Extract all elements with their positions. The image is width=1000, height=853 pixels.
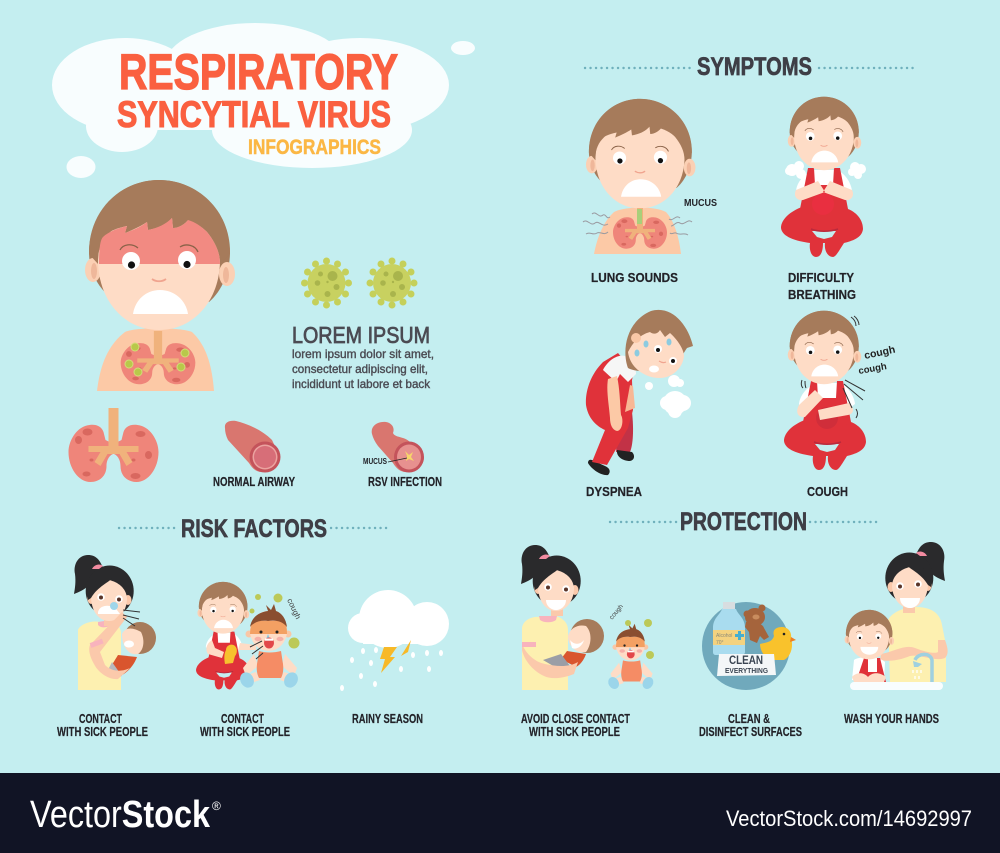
registered mark: ® [212, 799, 221, 813]
icon: viruses [301, 258, 418, 308]
water [913, 670, 921, 679]
arm and hand [607, 376, 622, 431]
symptom: dyspnea [586, 310, 693, 499]
symptom: lung sounds [583, 99, 717, 285]
text block: lorem ipsum: lorem ipsum dolor sit amet, [292, 347, 434, 361]
label: DYSPNEA [586, 485, 642, 499]
head [788, 97, 861, 170]
title line 1: RESPIRATORY [119, 44, 398, 100]
mother body [78, 620, 121, 690]
protection: wash your hands [844, 542, 948, 726]
head [788, 311, 861, 384]
baby [570, 619, 604, 653]
mucus label: MUCUS [363, 456, 387, 466]
text block: lorem ipsum: LOREM IPSUM [292, 322, 430, 348]
arms [795, 181, 853, 200]
heading: risk factors: RISK FACTORS [181, 515, 327, 543]
mother body [888, 607, 946, 682]
body [784, 381, 866, 470]
symptom: difficulty breathing [781, 97, 866, 302]
label: WITH SICK PEOPLE [529, 725, 620, 739]
back leg [616, 412, 633, 452]
label: BREATHING [788, 288, 856, 302]
lightning [380, 640, 411, 673]
teddy bear [744, 604, 769, 643]
sign [717, 654, 776, 676]
protection: clean and disinfect [699, 602, 802, 739]
airway tube [225, 421, 280, 472]
mucus pointer [388, 458, 407, 462]
cough text: cough [285, 597, 303, 621]
mother arm [89, 612, 130, 679]
icon: lungs [68, 408, 158, 482]
virus spots in lungs [125, 343, 189, 376]
label: CONTACT [79, 712, 122, 726]
label: AVOID CLOSE CONTACT [521, 712, 630, 726]
cough text: cough [608, 603, 625, 621]
breath puffs [785, 161, 866, 179]
lungs [121, 331, 195, 384]
logo: VectorStock [30, 794, 211, 836]
overalls [586, 353, 634, 465]
shoes [588, 450, 634, 475]
baby shirt [110, 655, 137, 675]
label [521, 712, 630, 739]
label [57, 712, 148, 739]
risk: rainy season [340, 590, 449, 726]
head [85, 180, 235, 330]
mother head [885, 542, 945, 613]
arm behind [625, 385, 635, 412]
heading: protection: PROTECTION [680, 508, 807, 536]
sweat drops [634, 338, 672, 356]
protection: clean and disinfect: 70° [716, 640, 724, 646]
text block: lorem ipsum: incididunt ut labore et back [292, 377, 431, 391]
risk: contact with sick child [196, 582, 303, 739]
mother head [521, 545, 581, 616]
rain drops [340, 647, 443, 691]
fever band [99, 218, 220, 264]
rubber duck [760, 627, 792, 660]
protection: clean and disinfect: Alcohol [716, 633, 732, 639]
airway tube [372, 422, 424, 472]
title line 2: SYNCYTIAL VIRUS [117, 94, 391, 135]
torso [594, 208, 681, 254]
url: VectorStock.com/14692997 [726, 806, 972, 831]
label [699, 712, 802, 739]
virus particles [250, 594, 300, 648]
boy body [196, 632, 249, 690]
label: CONTACT [221, 712, 264, 726]
label [200, 712, 290, 739]
arms [797, 390, 853, 420]
normal airway [213, 421, 296, 489]
protection: clean and disinfect: CLEAN [729, 655, 763, 667]
sick child [606, 624, 655, 691]
thought cloud with title [52, 23, 475, 178]
motion marks [801, 316, 865, 418]
boy body [852, 657, 885, 682]
symptom: cough: cough [858, 361, 888, 377]
circle backdrop [702, 602, 790, 690]
faucet [915, 654, 932, 682]
storm cloud [348, 590, 449, 648]
label: WASH YOUR HANDS [844, 712, 939, 726]
RSV infected airway [363, 422, 442, 489]
label: RSV INFECTION [368, 475, 442, 489]
label: DISINFECT SURFACES [699, 725, 802, 739]
heading: symptoms: SYMPTOMS [697, 53, 812, 81]
main boy with infected lungs [85, 180, 235, 391]
mother arm [880, 640, 948, 661]
mother arm [522, 644, 578, 678]
cough text: cough [863, 344, 896, 362]
label: NORMAL AIRWAY [213, 475, 296, 489]
baby head [124, 622, 156, 654]
mucus label: MUCUS [684, 198, 717, 209]
head [586, 99, 695, 208]
protection: clean and disinfect: EVERYTHING [725, 666, 768, 675]
shirt [603, 356, 636, 382]
label: LUNG SOUNDS [591, 271, 678, 285]
cough marks [123, 610, 140, 626]
torso [97, 328, 214, 391]
label: WITH SICK PEOPLE [57, 725, 148, 739]
mouth [133, 290, 188, 314]
footer bar [0, 773, 1000, 853]
symptom: cough [784, 311, 896, 499]
sound waves [583, 213, 692, 235]
sink [850, 682, 943, 690]
head [625, 310, 693, 372]
label: WITH SICK PEOPLE [200, 725, 290, 739]
boy head [845, 610, 894, 659]
mucus in trachea [637, 209, 642, 224]
alcohol bottle [723, 602, 735, 609]
subtitle: INFOGRAPHICS [248, 136, 381, 159]
label: COUGH [807, 485, 848, 499]
rubber duck [224, 645, 237, 664]
sick child [237, 604, 301, 690]
mother head [74, 555, 134, 626]
virus particles [625, 619, 654, 659]
text block: lorem ipsum [292, 322, 434, 391]
label [788, 271, 856, 302]
risk: sick mother and baby [57, 555, 156, 739]
boy head [197, 582, 249, 634]
label: DIFFICULTY [788, 271, 855, 285]
label: RAINY SEASON [352, 712, 423, 726]
protection: avoid close contact [521, 545, 655, 739]
lungs [613, 208, 667, 249]
label: CLEAN & [728, 712, 770, 726]
mother body [522, 616, 568, 690]
text block: lorem ipsum: consectetur adipiscing elit, [292, 362, 428, 376]
breath puffs [645, 375, 691, 418]
body [781, 168, 863, 257]
cough marks [250, 641, 263, 659]
